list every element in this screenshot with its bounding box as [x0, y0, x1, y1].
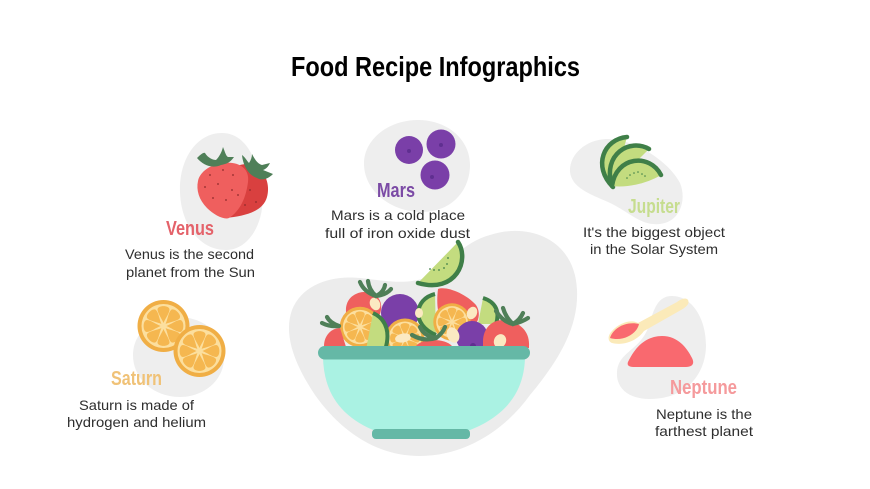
title: Food Recipe Infographics	[291, 51, 580, 82]
oats	[370, 298, 506, 346]
orange middle	[388, 318, 424, 346]
strawberry centre	[416, 340, 452, 346]
leaves	[322, 281, 528, 339]
blob: Venus background	[180, 133, 263, 250]
text: Jupiter description: It's the biggest object	[583, 224, 725, 240]
heading: Saturn: Saturn	[111, 368, 162, 390]
text: Venus description: planet from the Sun	[126, 264, 255, 280]
blob: bowl background	[289, 231, 577, 456]
panel: Mars	[325, 120, 470, 241]
text: Neptune description: farthest planet	[655, 423, 753, 439]
text: Neptune description	[655, 406, 753, 439]
heading: Jupiter: Jupiter	[628, 196, 680, 218]
icon: falling kiwi slice	[418, 242, 462, 285]
blob: Mars background	[364, 120, 470, 212]
panel: Venus	[125, 133, 273, 280]
purple berry right	[456, 321, 486, 346]
bowl rim	[318, 346, 530, 360]
icon: blueberries	[395, 130, 456, 190]
text: Venus description	[125, 246, 255, 280]
text: Neptune description: Neptune is the	[656, 406, 752, 422]
panel: Jupiter	[570, 137, 725, 257]
fruit pile	[322, 281, 529, 358]
strawberry far right	[483, 320, 529, 350]
text: Saturn description: Saturn is made of	[79, 397, 194, 413]
strawberry back right	[437, 288, 479, 322]
bowl body	[323, 358, 525, 430]
text: Jupiter description	[583, 224, 725, 257]
text: Venus description: Venus is the second	[125, 246, 254, 262]
panel: Neptune	[609, 296, 753, 439]
illustration: salad bowl	[289, 231, 577, 456]
kiwi centre	[420, 296, 436, 333]
orange right	[433, 303, 471, 341]
text: Saturn description: hydrogen and helium	[67, 414, 206, 430]
purple berry left	[381, 294, 418, 328]
orange left	[340, 306, 374, 346]
icon: orange slices	[138, 300, 226, 377]
icon: kiwi slices	[602, 137, 661, 187]
text: Jupiter description: in the Solar System	[590, 241, 718, 257]
blob: Jupiter background	[570, 139, 683, 224]
heading: Venus: Venus	[166, 218, 214, 240]
strawberry back left	[346, 292, 382, 314]
bowl foot	[372, 429, 470, 439]
heading: Mars: Mars	[377, 180, 415, 202]
blob: Saturn background	[133, 317, 224, 397]
text: Mars description	[325, 207, 470, 241]
blob: Neptune background	[617, 296, 706, 399]
kiwi right	[478, 298, 496, 324]
text: Saturn description	[67, 397, 206, 430]
heading: Neptune: Neptune	[670, 377, 737, 399]
text: Mars description: full of iron oxide dust	[325, 225, 470, 241]
icon: strawberries	[197, 147, 273, 218]
strawberry front left	[324, 328, 346, 346]
panel: Saturn	[67, 300, 226, 430]
text: Mars description: Mars is a cold place	[331, 207, 465, 223]
icon: spoon and powder	[609, 299, 693, 367]
kiwi front	[366, 315, 386, 346]
